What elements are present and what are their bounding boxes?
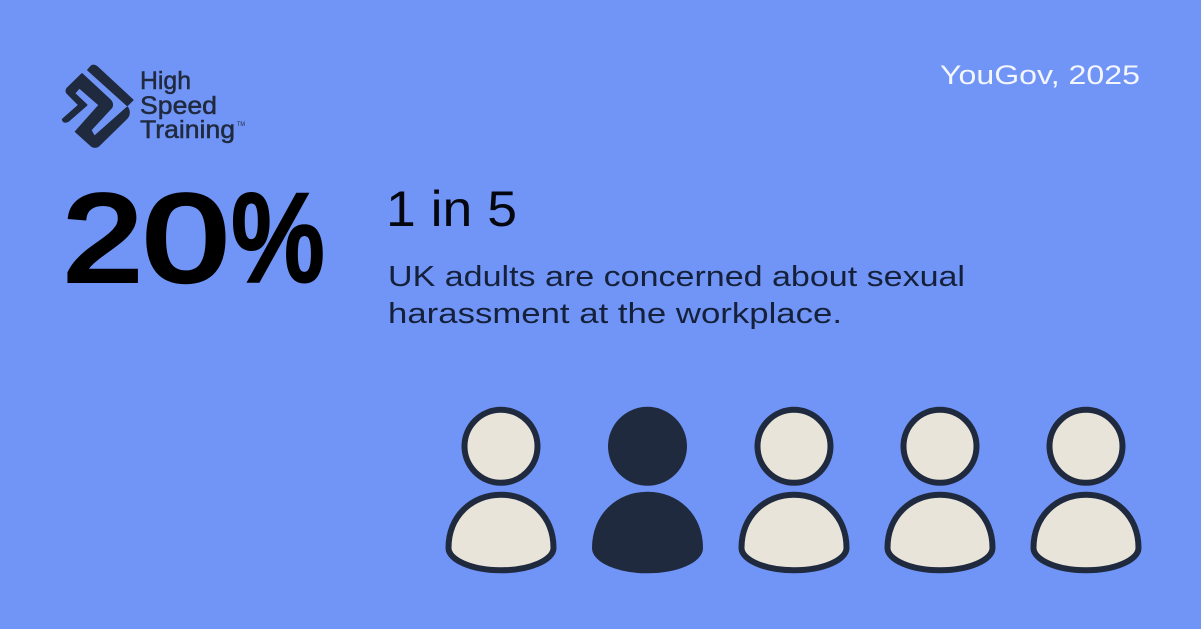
body text: harassment at the workplace. [388,298,842,330]
logo wordmark [140,67,245,144]
icon: logo mark [63,65,133,147]
logo wordmark: Training [140,116,235,144]
icon: person 5 [1034,410,1138,570]
icon: person 4 [888,410,992,570]
big stat: 20%: 2 [63,170,142,308]
body text: UK adults are concerned about sexual [388,261,965,293]
logo: High Speed Training [63,65,245,147]
icon: person 1 [448,410,554,570]
heading: 1 in 5: 1 in 5 [386,181,517,237]
icon: person 3 [742,410,846,570]
pictogram: 1 in 5 people [448,410,1138,570]
logo wordmark: Speed [140,92,217,120]
icon: person 2 highlighted [595,410,700,570]
logo wordmark: TM [237,122,245,128]
big stat: 20%: 0 [143,170,228,308]
source: YouGov, 2025: YouGov, 2025 [940,60,1140,90]
big stat: 20%: % [231,170,324,308]
big stat: 20% [63,170,324,308]
logo wordmark: High [140,67,191,95]
